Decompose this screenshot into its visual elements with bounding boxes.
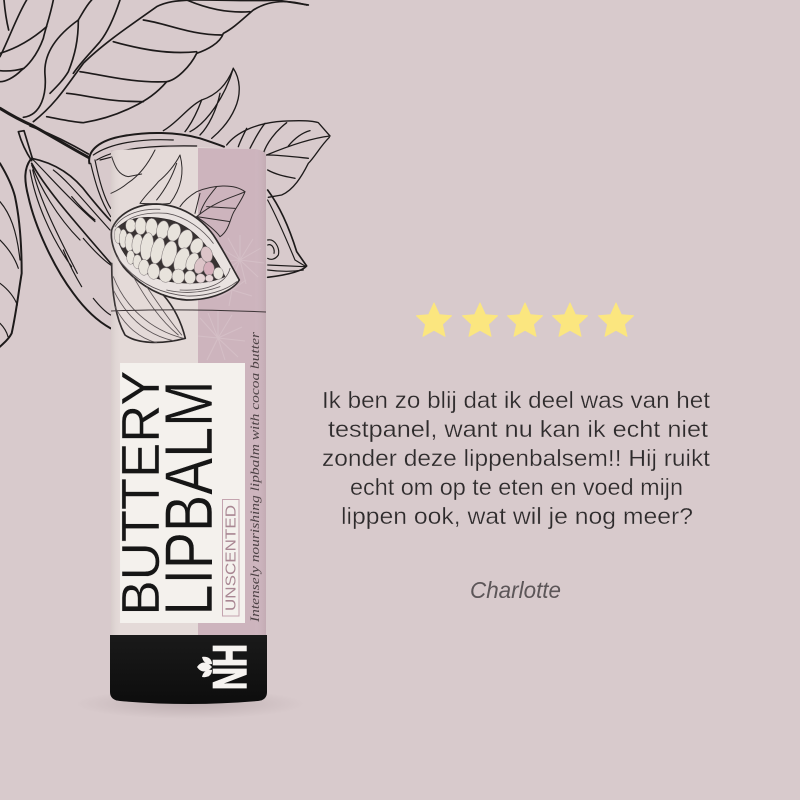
star 2 (462, 303, 498, 336)
pod cavity (115, 217, 225, 283)
review quote: lippen ook, wat wil je nog meer? (341, 503, 693, 529)
tube shading (111, 150, 266, 640)
reviewer name: Charlotte (470, 577, 561, 603)
brand logo: NH (203, 644, 256, 690)
star 5 (598, 303, 634, 336)
tube floor shadow (75, 689, 305, 719)
left cocoa pod (18, 131, 111, 328)
five star rating (416, 303, 634, 336)
firework pattern (198, 235, 264, 360)
review quote: testpanel, want nu kan ik echt niet (328, 416, 708, 442)
pod shell (111, 204, 239, 300)
review quote (322, 387, 710, 529)
tube cocoa pod illustration (111, 150, 245, 343)
brand logo (197, 644, 256, 690)
botanical line art background (0, 0, 330, 347)
black cap (110, 635, 267, 704)
lower pod (112, 263, 185, 343)
right cocoa pod tip (268, 190, 307, 277)
large leaf (33, 0, 308, 123)
review quote: zonder deze lippenbalsem!! Hij ruikt (322, 445, 710, 471)
lip balm tube (110, 147, 267, 704)
tube pink panel (198, 148, 266, 640)
product name: buttery: BUTTERY (111, 370, 171, 616)
tube leaves (111, 150, 245, 237)
star 4 (552, 303, 588, 336)
tagline: Intensely nourishing lipbalm with cocoa butter (247, 331, 262, 623)
rear cocoa pod rim (89, 133, 224, 217)
review quote: echt om op te eten en voed mijn (350, 474, 683, 500)
review quote: Ik ben zo blij dat ik deel was van het (322, 387, 710, 413)
cocoa beans (114, 217, 223, 284)
star 3 (508, 303, 542, 336)
unscented badge: UNSCENTED (224, 505, 240, 611)
tube seam line (111, 310, 266, 312)
small leaf (163, 68, 239, 138)
tube body (111, 147, 266, 640)
product name: lipbalm: LIPBALM (151, 380, 227, 616)
top corner leaf (0, 0, 53, 82)
right leaf (227, 121, 330, 197)
upper left leaf (23, 0, 120, 117)
star 1 (416, 303, 452, 336)
main branch (0, 108, 88, 157)
label panel (120, 363, 245, 623)
lower left leaf (0, 163, 22, 347)
